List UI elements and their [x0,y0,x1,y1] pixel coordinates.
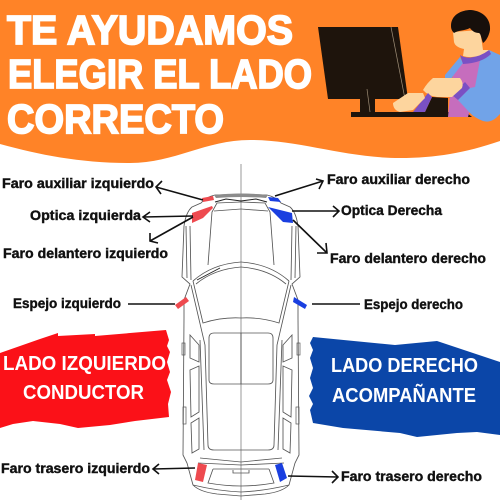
icon: person [393,10,500,122]
part labels right: Faro delantero derecho [330,251,486,266]
car left half [182,194,241,496]
part labels right: Faro auxiliar derecho [327,172,470,187]
part labels right: Espejo derecho [364,297,463,312]
orange header banner [0,0,500,163]
part labels left [1,176,168,476]
panel: lado izquierdo: CONDUCTOR [23,382,145,404]
title: CORRECTO [7,96,224,142]
title: TE AYUDAMOS [7,7,293,53]
panel: lado izquierdo [0,330,171,428]
part labels left: Faro delantero izquierdo [3,246,168,261]
panel: lado derecho: LADO DERECHO [331,355,478,377]
panel: lado derecho [309,337,500,437]
grey front bumper band [214,194,268,198]
part labels right: Faro trasero derecho [341,469,482,484]
title [7,7,312,142]
panel: lado izquierdo: LADO IZQUIERDO [3,353,166,375]
arrows [128,179,360,483]
car top view [182,194,300,496]
part labels right [327,172,486,484]
part labels left: Faro trasero izquierdo [1,461,150,476]
part labels left: Faro auxiliar izquierdo [2,176,154,191]
center divider line [240,164,242,500]
left side red lights [175,196,214,482]
title: ELEGIR EL LADO [8,51,312,97]
panel: lado derecho: ACOMPAÑANTE [332,384,476,407]
part labels right: Optica Derecha [341,203,442,218]
part labels left: Optica izquierda [30,208,142,223]
icon: monitor [318,27,454,117]
car right half [241,194,300,496]
illustration: person at computer [318,10,500,122]
right side blue lights [268,197,307,482]
part labels left: Espejo izquierdo [13,296,121,311]
